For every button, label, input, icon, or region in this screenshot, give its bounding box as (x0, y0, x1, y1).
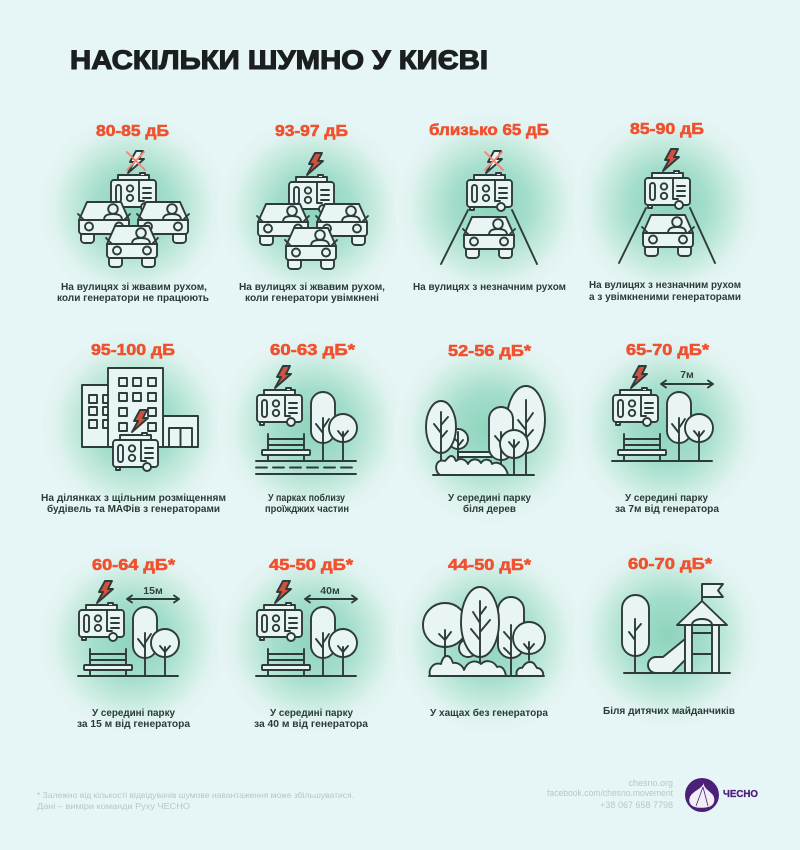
icon: crossed bolt (127, 151, 145, 173)
icon: red bolt (663, 149, 679, 171)
value: 44-50 dB: 44-50 дБ* (448, 557, 532, 574)
value: 65-70 dB: 65-70 дБ* (626, 342, 710, 359)
value: 52-56 dB: 52-56 дБ* (448, 343, 532, 360)
caption: за 7м від генератора (615, 504, 719, 515)
panel: light traffic (395, 110, 585, 300)
caption: На вулицях з незначним рухом (589, 280, 741, 291)
caption: На вулицях зі жвавим рухом, (239, 282, 385, 293)
panel: mid-park by trees (395, 335, 585, 525)
caption: біля дерев (463, 503, 516, 515)
caption: за 15 м від генератора (77, 719, 190, 730)
value: 93-97 dB: 93-97 дБ (275, 123, 348, 140)
icon: slide and tower (624, 584, 730, 673)
logo: ЧЕСНО: ЧЕСНО (723, 788, 758, 800)
icon: car (642, 215, 694, 256)
icon: red bolt (307, 153, 323, 175)
arrow: 7 m (661, 380, 713, 388)
value: 60-64 dB: 60-64 дБ* (92, 557, 176, 574)
caption: будівель та МАФів з генераторами (47, 503, 220, 515)
panel: busy traffic, generators on (218, 115, 408, 305)
arrow: 40 m (305, 596, 357, 602)
caption: У хащах без генератора (430, 707, 548, 719)
icon: dense trees (423, 587, 545, 676)
icon: buildings (82, 368, 198, 447)
icon: crossed bolt (485, 151, 503, 173)
icon: road (256, 468, 356, 474)
caption: На вулицях зі жвавим рухом, (61, 282, 207, 293)
logo: ЧЕСНО (685, 778, 758, 812)
panel: 7 m from generator (573, 332, 763, 522)
caption: за 40 м від генератора (254, 719, 368, 730)
panel: thickets without generator (395, 545, 585, 735)
contacts: +38 067 658 7798 (600, 800, 673, 810)
caption: коли генератори увімкнені (245, 293, 379, 304)
icon: tree (622, 595, 649, 673)
caption: коли генератори не працюють (57, 293, 209, 304)
caption: а з увімкненими генераторами (589, 292, 741, 303)
icon: red bolt (132, 410, 148, 432)
caption: У середині парку (270, 708, 353, 719)
arrow: 15 m (127, 596, 179, 602)
icon: generator (111, 173, 156, 211)
footnote: Дані – виміри команди Руху ЧЕСНО (37, 801, 190, 811)
panel: playgrounds (573, 540, 763, 730)
footnote: * Залежно від кількості відвідувачів шумове навантаження може збільшуватися. (37, 790, 354, 800)
icon: trees and bush (426, 386, 545, 475)
caption: На ділянках з щільним розміщенням (41, 493, 226, 504)
icon: car (463, 217, 515, 258)
icon: generator (467, 173, 512, 211)
icon: generator (113, 433, 158, 471)
value: about 65 dB: близько 65 дБ (429, 122, 549, 139)
value: 45-50 dB: 45-50 дБ* (269, 557, 354, 574)
caption: проїжджих частин (265, 504, 349, 515)
caption: У середині парку (448, 493, 531, 504)
panel: dense buildings (40, 330, 230, 520)
caption: На вулицях з незначним рухом (413, 282, 566, 293)
icon: generator (645, 171, 690, 209)
label: 7 m: 7м (680, 369, 694, 381)
icon: generator (289, 175, 334, 213)
icon: road (441, 210, 537, 264)
icon: cars (257, 204, 368, 269)
value: 60-63 dB: 60-63 дБ* (270, 342, 356, 359)
panel: parks near roads (218, 332, 408, 522)
caption: У середині парку (625, 493, 708, 504)
value: 80-85 dB: 80-85 дБ (96, 123, 169, 140)
contacts: facebook.com/chesno.movement (547, 788, 673, 798)
panel: 40 m from generator (218, 545, 408, 735)
value: 95-100 dB: 95-100 дБ (91, 342, 175, 359)
icon: park with generator (78, 581, 179, 676)
value: 60-70 dB: 60-70 дБ* (628, 556, 713, 573)
contacts: chesno.org (628, 778, 673, 788)
caption: У середині парку (92, 708, 175, 719)
icon: park with generator (256, 366, 357, 461)
label: 15 m: 15м (143, 585, 163, 597)
panel: 15 m from generator (38, 545, 228, 735)
title: НАСКІЛЬКИ ШУМНО У КИЄВІ (70, 45, 488, 75)
value: 85-90 dB: 85-90 дБ (630, 121, 704, 138)
label: 40 m: 40м (320, 585, 340, 597)
panel: busy traffic, generators off (38, 113, 228, 304)
caption: Біля дитячих майданчиків (603, 706, 735, 717)
caption: У парках поблизу (268, 492, 345, 504)
icon: road (619, 208, 715, 263)
icon: park with generator (256, 581, 357, 676)
panel: light traffic, generators on (573, 110, 763, 303)
icon: cars (78, 202, 189, 267)
icon: park with generator (612, 366, 713, 461)
